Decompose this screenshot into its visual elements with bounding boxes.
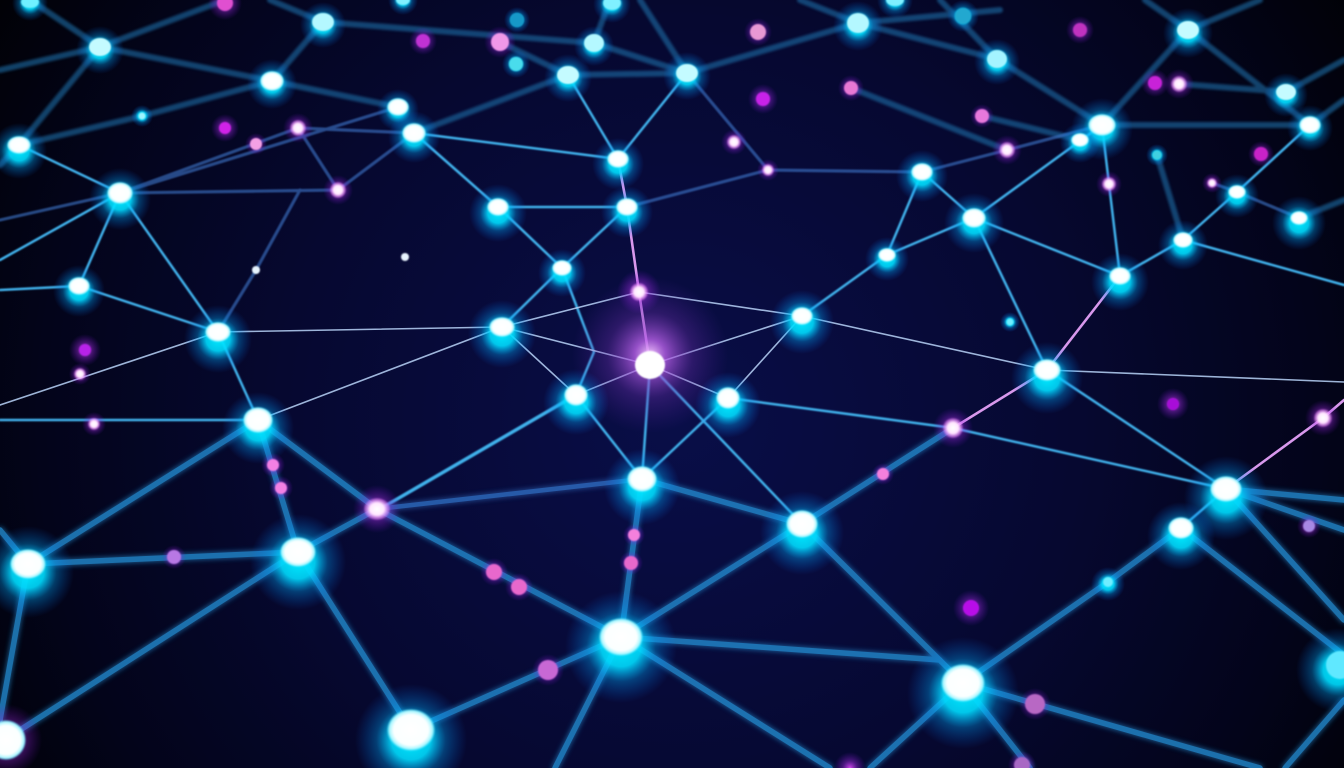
middle lines: blue — [0, 73, 1344, 528]
pink lines — [618, 159, 1344, 489]
thin bright lines: centre — [0, 292, 1344, 420]
near lines: thick lower part — [0, 420, 1344, 768]
centre hub: pink halo — [572, 277, 728, 433]
upper lines: blue-violet — [0, 73, 1299, 332]
far lines: top of the scene — [0, 0, 1344, 240]
